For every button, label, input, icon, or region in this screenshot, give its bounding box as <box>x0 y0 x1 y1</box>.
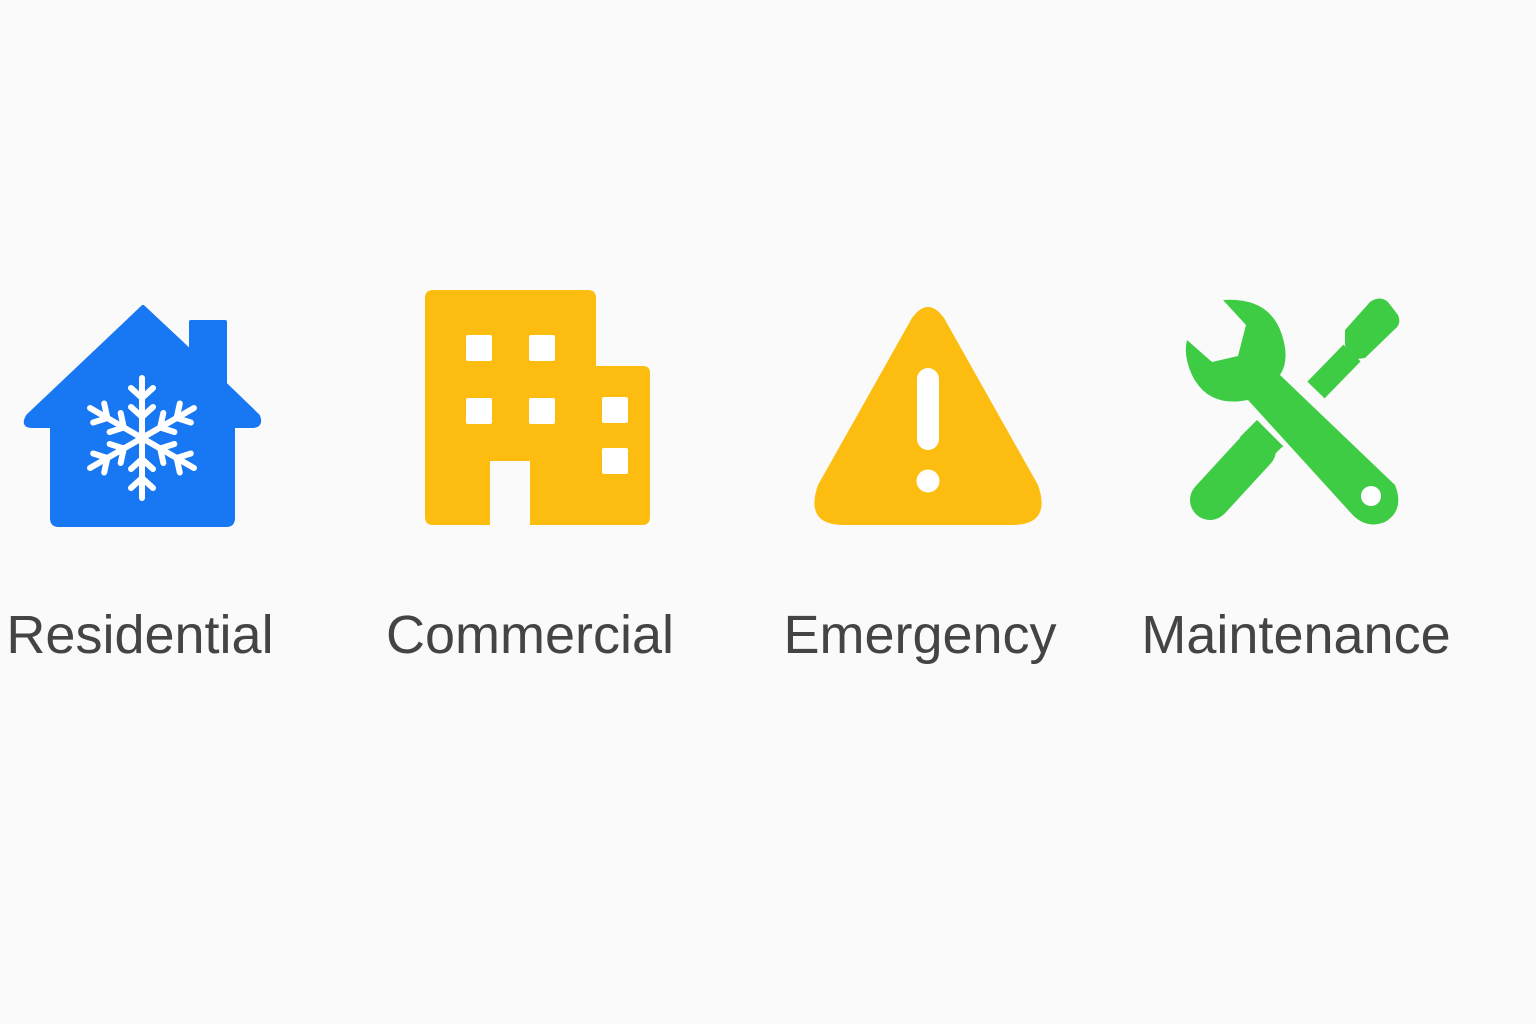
label: Maintenance: Maintenance <box>1141 605 1451 665</box>
icon: commercial building <box>425 290 650 525</box>
label: Emergency: Emergency <box>783 605 1057 665</box>
icon: warning triangle <box>814 307 1042 525</box>
icon: house with snowflake <box>26 307 259 525</box>
icon: wrench and screwdriver <box>1186 298 1399 524</box>
label: Residential: Residential <box>6 605 274 665</box>
label: Commercial: Commercial <box>386 605 674 665</box>
